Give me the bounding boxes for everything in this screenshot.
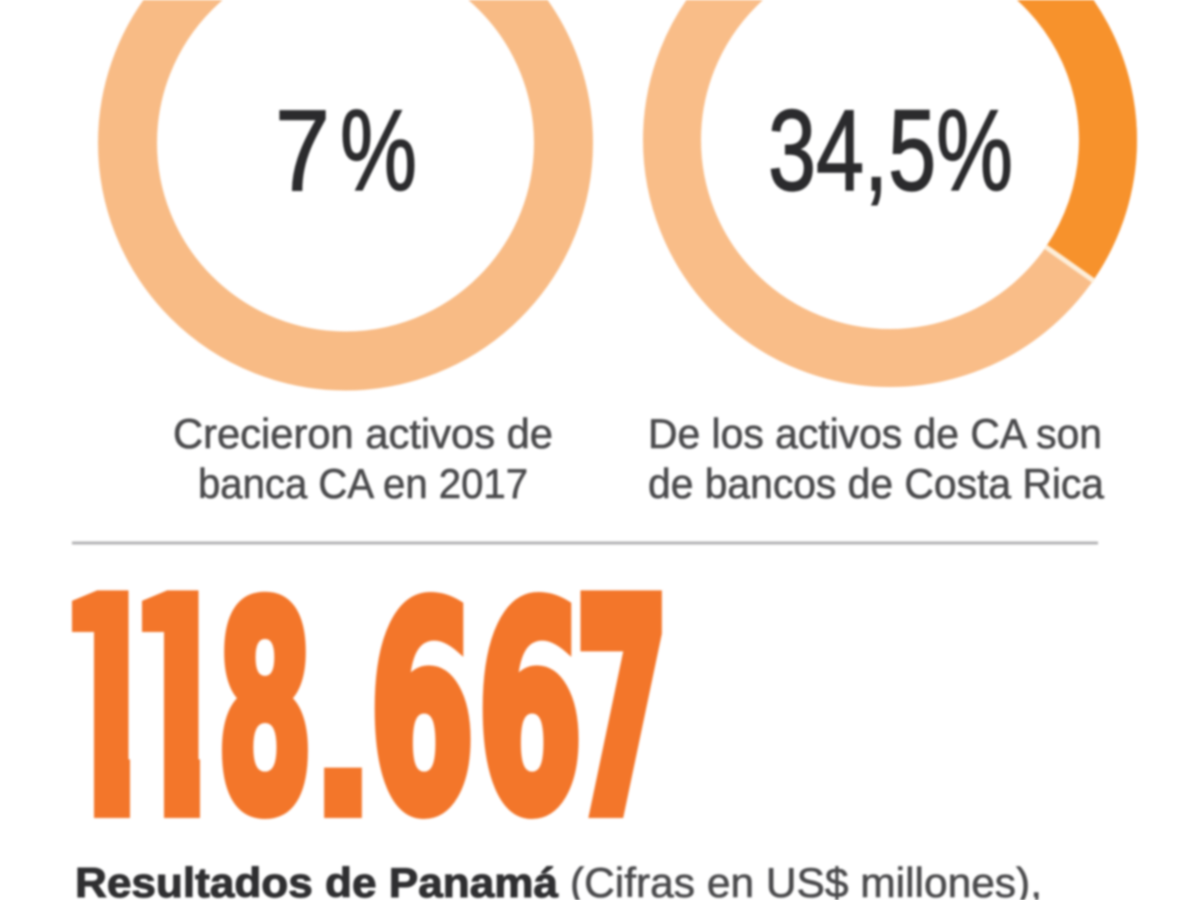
caption: crecieron activos <box>173 410 553 507</box>
caption: activos de Costa Rica <box>648 410 1105 507</box>
value: 7 %: % <box>340 87 417 215</box>
big number: 118.667: 8 <box>217 548 313 875</box>
donut chart: 34,5% <box>672 0 1108 358</box>
caption: activos de Costa Rica: De los activos de CA son <box>648 410 1102 457</box>
value: 34,5%: 34,5% <box>768 87 1013 215</box>
big number: 118.667: 1 <box>58 545 156 874</box>
donut chart: 7% <box>128 0 564 361</box>
caption: crecieron activos: banca CA en 2017 <box>198 460 528 507</box>
big number: 118.667 <box>70 588 664 821</box>
panel: 7% donut stat <box>128 0 564 507</box>
big number: 118.667: 6 <box>477 548 583 875</box>
big number: 118.667: 1 <box>128 545 226 874</box>
caption: activos de Costa Rica: de bancos de Costa Rica <box>648 460 1105 507</box>
caption: crecieron activos: Crecieron activos de <box>173 410 553 457</box>
big number: 118.667: 7 <box>577 545 667 874</box>
value: 7 % <box>275 87 417 215</box>
big number: 118.667: . <box>321 668 365 843</box>
panel: 34,5% donut stat <box>648 0 1108 507</box>
value: 7 %: 7 <box>275 87 330 215</box>
big number: 118.667: 6 <box>369 548 475 875</box>
text block: resultados de Panamá <box>75 859 1042 900</box>
